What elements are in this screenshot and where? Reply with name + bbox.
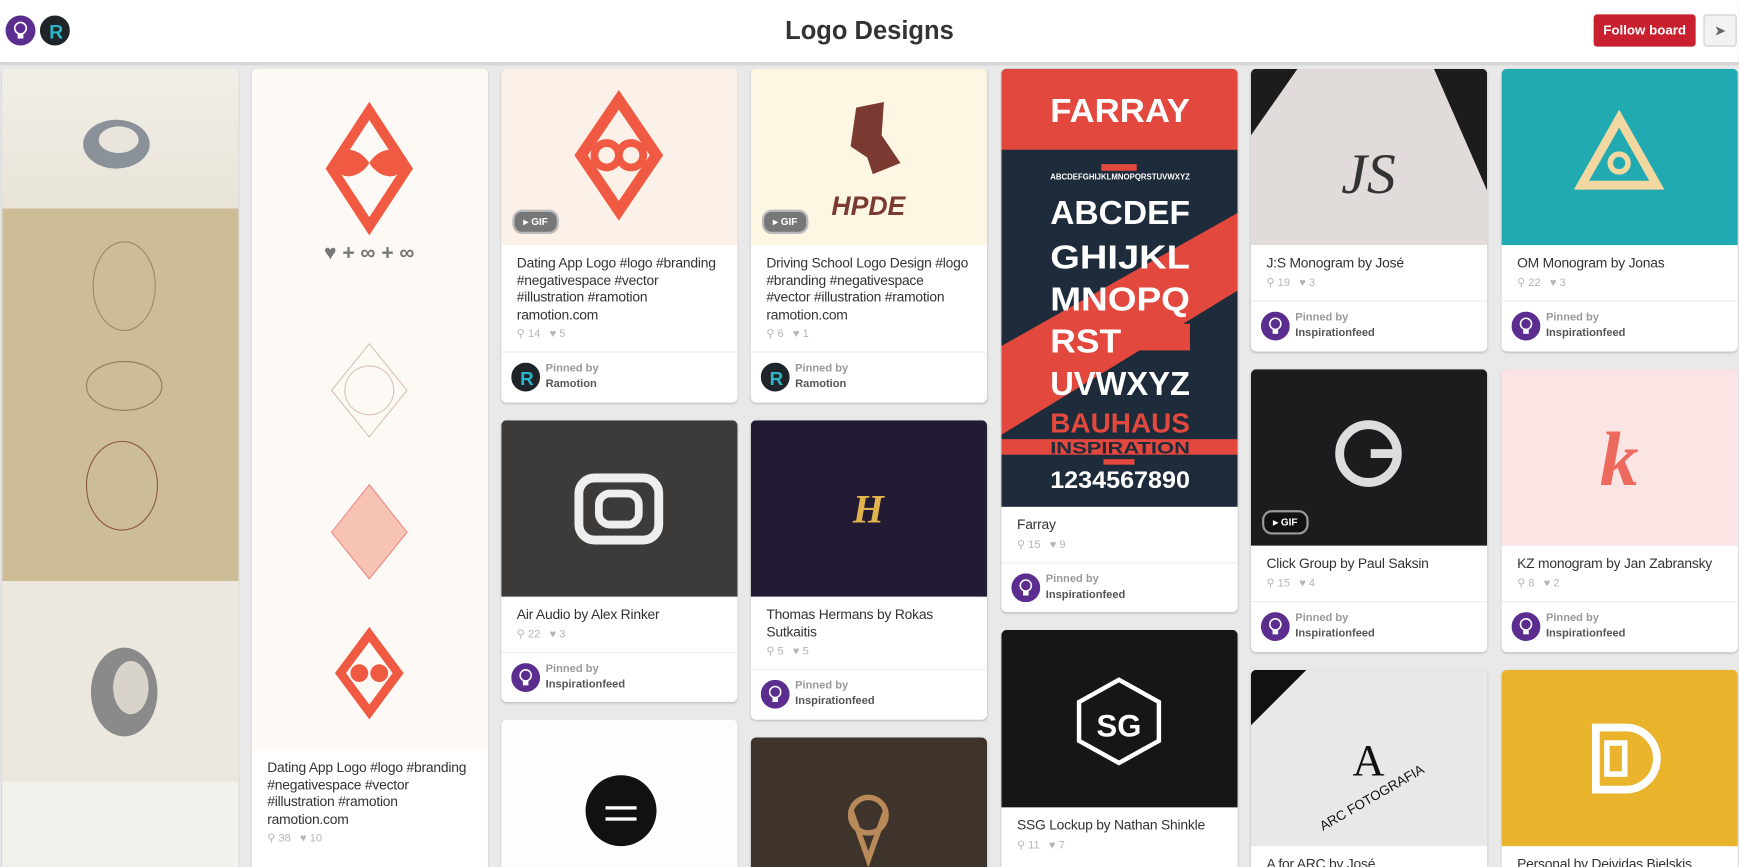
column 1: sketches (2, 69, 238, 867)
column 4 card 2: ⚲ 5 ♥ 5 (766, 645, 809, 658)
column 6 card 2: ⚲ 15 ♥ 4 (1266, 577, 1315, 589)
column 4 card 1: HPDE (831, 191, 907, 221)
column 6 card 1: JS (1341, 143, 1396, 206)
column 4 card 2: Inspirationfeed (795, 695, 875, 708)
column 5 card 1: Farray: ⚲ 15 ♥ 9 (1017, 538, 1066, 551)
column 4 card 2 (751, 420, 987, 720)
column 7 card 2: Pinned by (1546, 612, 1599, 624)
column 3 card 1: R (520, 368, 534, 389)
column 5 card 1: Farray: ABCDEF (1050, 195, 1190, 232)
column 6 card 3: ARC FOTOGRAFIA (1317, 761, 1427, 834)
column 4 card 1: ramotion.com (766, 307, 848, 322)
column 5 card 1: Farray: Pinned by (1046, 573, 1099, 585)
column 3 card 2: Air Audio by Alex Rinker (517, 607, 659, 622)
column 5 card 1: Farray: FARRAY (1050, 93, 1190, 130)
column 6 card 3: A (1352, 735, 1385, 785)
send button (1703, 14, 1737, 47)
column 5 card 1: Farray: Farray (1017, 517, 1056, 532)
column 4 card 1: R (770, 368, 784, 389)
column 6 card 1 (1251, 69, 1487, 352)
column 7 card 1: ⚲ 22 ♥ 3 (1517, 277, 1566, 289)
caption: #illustration #ramotion (267, 794, 398, 810)
column 5 card 1: Farray (1001, 69, 1238, 612)
column 7 card 2: KZ monogram by Jan Zabransky (1517, 556, 1712, 571)
column 6 card 2: Pinned by (1295, 612, 1348, 624)
column 4 card 2: Sutkaitis (766, 624, 817, 639)
column 5 card 1: Farray: GHIJKL (1050, 239, 1190, 276)
column 6 card 1: Pinned by (1295, 311, 1348, 323)
column 6 card 1: Inspirationfeed (1295, 327, 1375, 339)
column 4 card 1: Driving School Logo Design #logo (766, 255, 968, 271)
caption: #negativespace #vector (267, 777, 409, 792)
column 3 card 2: Inspirationfeed (546, 678, 625, 690)
column 5 card 1: Farray: MNOPQ (1050, 282, 1190, 319)
column 7 card 1 (1502, 69, 1738, 352)
column 3 card 1: ▸ GIF (523, 216, 548, 227)
column 2: tall pin: ♥ + ∞ + ∞ (324, 242, 415, 265)
send button: ➤ (1714, 22, 1726, 39)
column 5 card 2: SSG Lockup by Nathan Shinkle (1017, 817, 1205, 833)
column 4 card 3 (751, 737, 987, 867)
caption: Dating App Logo #logo #branding (267, 760, 466, 775)
column 5 card 2: SG (1097, 708, 1141, 743)
column 3 card 1: Pinned by (546, 363, 599, 375)
column 6 card 2: Inspirationfeed (1295, 627, 1375, 639)
column 3 card 2: ⚲ 22 ♥ 3 (517, 628, 565, 640)
column 7 card 2 (1502, 369, 1738, 652)
column 5 card 1: Farray: RST (1050, 324, 1121, 361)
column 5 card 1: Farray: INSPIRATION (1050, 439, 1190, 458)
column 5 card 2 (1001, 630, 1238, 867)
avatar: ramotion: R (49, 22, 63, 44)
column 5 card 1: Farray: ABCDEFGHIJKLMNOPQRSTUVWXYZ (1050, 172, 1190, 182)
header bar (0, 0, 1739, 63)
column 4 card 1: ⚲ 6 ♥ 1 (766, 328, 809, 340)
column 3 card 1: Dating App Logo #logo #branding (517, 255, 716, 271)
column 3 card 1: ⚲ 14 ♥ 5 (517, 328, 565, 340)
column 5 card 2: ⚲ 11 ♥ 7 (1017, 839, 1065, 851)
column 3 card 1: #negativespace #vector (517, 272, 658, 288)
column 6 card 3 (1251, 670, 1487, 867)
caption (267, 760, 466, 827)
column 4 card 2: Pinned by (795, 680, 848, 692)
column 4 card 1: Pinned by (795, 363, 848, 375)
column 4 card 1: #vector #illustration #ramotion (766, 289, 944, 305)
column 6 card 2 (1251, 369, 1487, 652)
column 6 card 2: Click Group by Paul Saksin (1266, 556, 1429, 571)
column 2: tall pin: ⚲ 38 ♥ 10 (267, 833, 322, 845)
column 6 card 1: ⚲ 19 ♥ 3 (1266, 277, 1315, 289)
column 5 card 1: Farray: BAUHAUS (1050, 408, 1190, 439)
column 7 card 1: Pinned by (1546, 311, 1599, 323)
caption: ramotion.com (267, 811, 349, 827)
column 3 card 2 (501, 420, 737, 702)
column 4 card 1: Ramotion (795, 378, 846, 390)
column 4 card 1: #branding #negativespace (766, 272, 924, 288)
column 7 card 1: OM Monogram by Jonas (1517, 255, 1664, 271)
column 7 card 2: ⚲ 8 ♥ 2 (1517, 577, 1560, 589)
column 4 card 2: H (852, 486, 886, 531)
column 3 card 1: Ramotion (546, 378, 597, 390)
column 2: tall pin (252, 69, 488, 867)
column 3 card 3 (501, 720, 737, 867)
column 3 card 2: Pinned by (546, 663, 599, 675)
column 7 card 2: Inspirationfeed (1546, 627, 1625, 639)
column 6 card 2: ▸ GIF (1273, 517, 1298, 528)
column 7 card 3 (1502, 670, 1738, 867)
column 4 card 1 (751, 69, 987, 403)
column 7 card 2: k (1600, 417, 1639, 503)
column 6 card 1: J:S Monogram by José (1266, 255, 1404, 271)
follow button: Follow board (1603, 22, 1686, 38)
column 3 card 1: #illustration #ramotion (517, 289, 647, 305)
column 5 card 1: Farray: Inspirationfeed (1046, 588, 1125, 601)
column 5 card 1: Farray: UVWXYZ (1050, 366, 1190, 403)
column 5 card 1: Farray: 1234567890 (1050, 467, 1190, 494)
avatar: ramotion (40, 16, 70, 46)
column 3 card 1 (501, 69, 737, 403)
column 3 card 1: ramotion.com (517, 307, 598, 322)
column 7 card 1: Inspirationfeed (1546, 327, 1625, 339)
column 4 card 2: Thomas Hermans by Rokas (766, 607, 933, 622)
title: Logo Designs (785, 16, 954, 44)
follow button (1594, 14, 1696, 47)
column 4 card 1: ▸ GIF (773, 216, 797, 227)
avatar: inspirationfeed (6, 16, 36, 46)
